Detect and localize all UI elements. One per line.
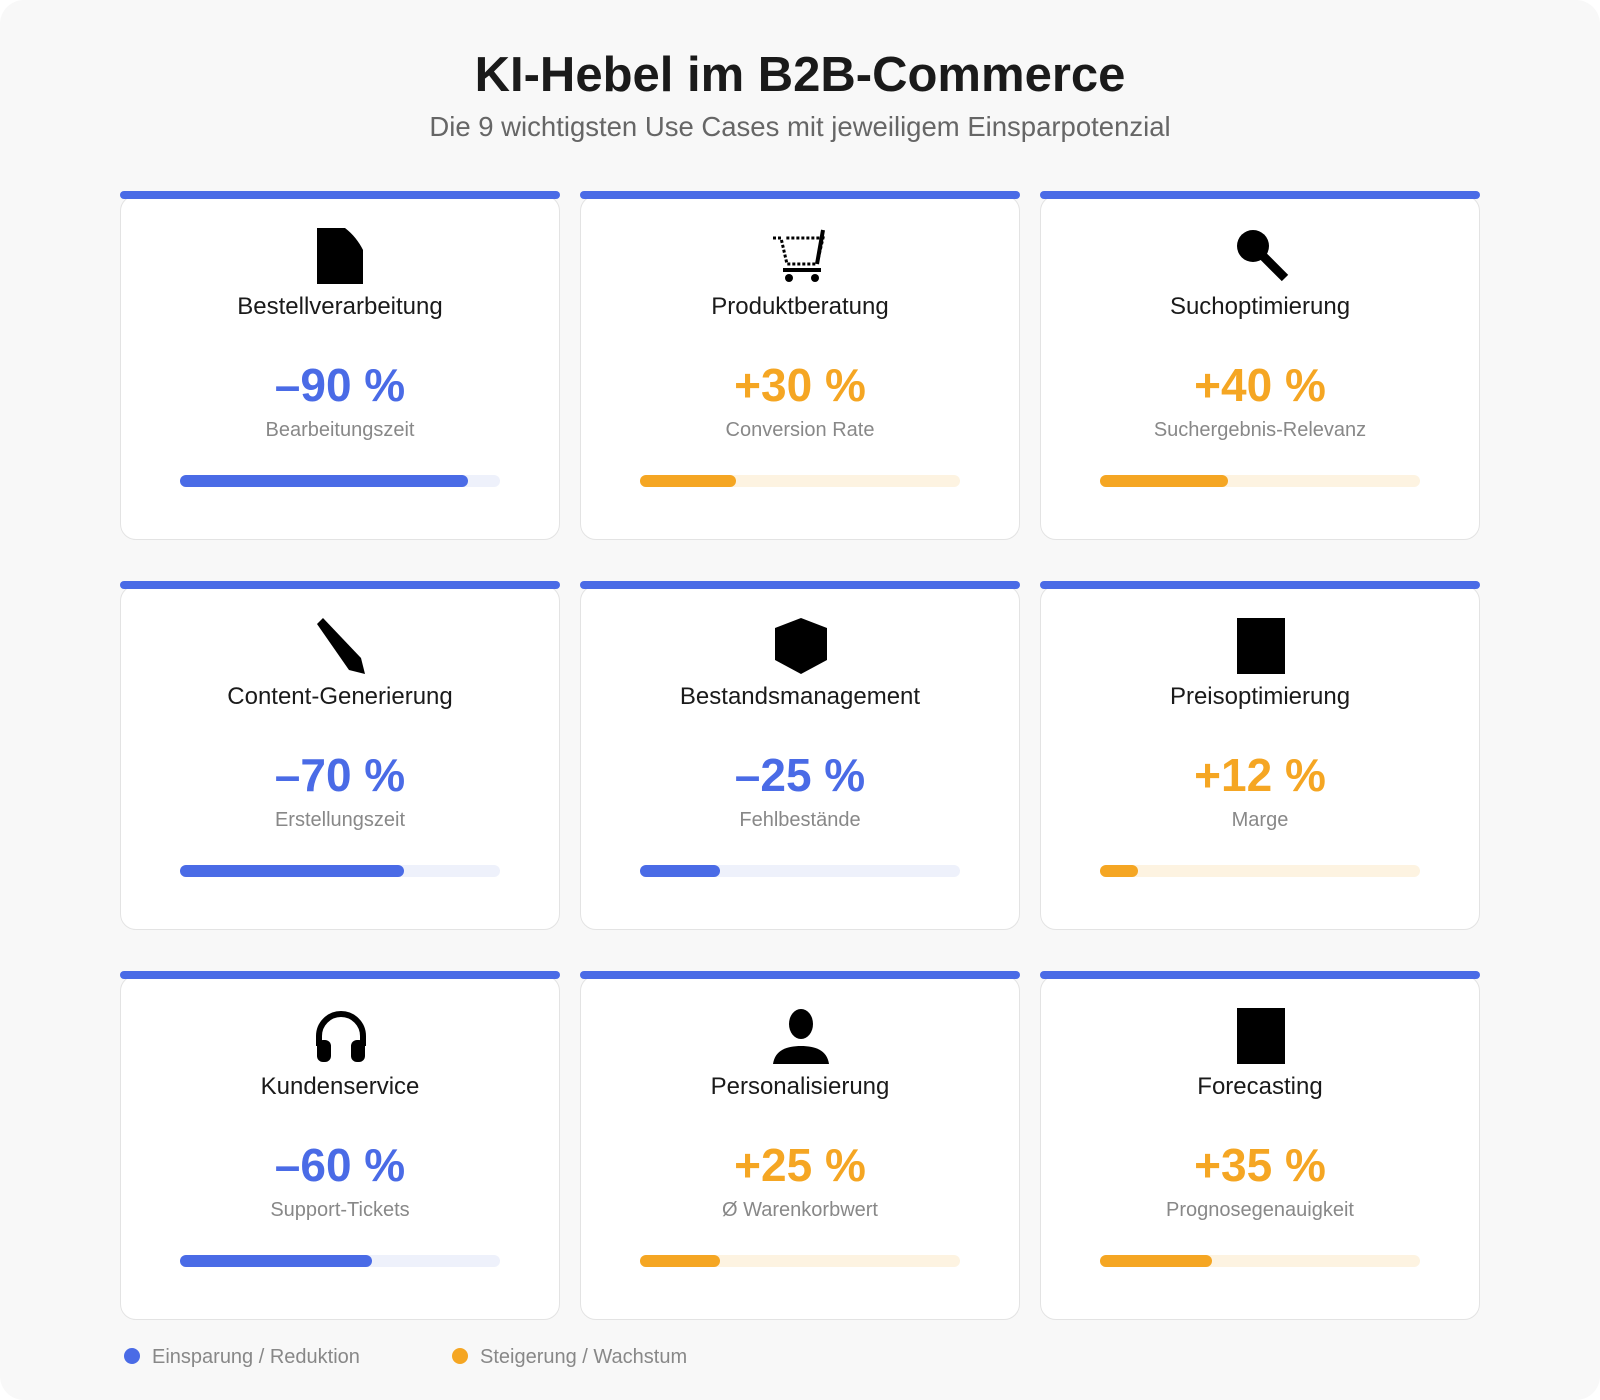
panel: Preisoptimierung: Marge xyxy=(1232,809,1288,831)
panel: Bestandsmanagement: –25 % xyxy=(735,749,865,801)
icon: rectangle xyxy=(1237,1008,1285,1064)
panel: Bestellverarbeitung: –90 % xyxy=(275,359,405,411)
bar xyxy=(1100,1255,1420,1267)
panel: Kundenservice: –60 % xyxy=(275,1139,405,1191)
legend: Steigerung: Steigerung / Wachstum xyxy=(480,1346,687,1368)
bar xyxy=(640,475,960,487)
icon: magnifier xyxy=(1237,230,1288,282)
panel: Suchoptimierung xyxy=(1040,195,1480,540)
panel: Produktberatung xyxy=(580,195,1020,540)
panel: Suchoptimierung: Suchoptimierung xyxy=(1170,293,1350,320)
panel: Content-Generierung xyxy=(120,585,560,930)
panel: Bestandsmanagement: Bestandsmanagement xyxy=(680,683,920,710)
icon: cart xyxy=(773,230,825,282)
panel: Personalisierung: Ø Warenkorbwert xyxy=(722,1199,878,1221)
bar xyxy=(640,865,960,877)
panel: Bestellverarbeitung xyxy=(120,195,560,540)
panel: Content-Generierung: –70 % xyxy=(275,749,405,801)
bar xyxy=(180,865,500,877)
panel: Bestandsmanagement: Fehlbestände xyxy=(739,809,861,831)
icon: box xyxy=(775,618,827,674)
panel: Preisoptimierung: Preisoptimierung xyxy=(1170,683,1350,710)
bar xyxy=(180,1255,500,1267)
panel: Produktberatung: +30 % xyxy=(734,359,866,411)
title: KI-Hebel im B2B-Commerce xyxy=(475,48,1125,102)
panel: Preisoptimierung xyxy=(1040,585,1480,930)
icon: pencil xyxy=(317,618,365,674)
icon: person xyxy=(773,1009,829,1064)
panel: Forecasting: Forecasting xyxy=(1197,1073,1323,1100)
bar xyxy=(1100,475,1420,487)
bar xyxy=(180,475,500,487)
bar xyxy=(1100,865,1420,877)
panel: Forecasting: Prognosegenauigkeit xyxy=(1166,1199,1354,1221)
panel: Kundenservice: Support-Tickets xyxy=(270,1199,410,1221)
panel: Bestellverarbeitung: Bestellverarbeitung xyxy=(237,293,443,320)
panel: Kundenservice: Kundenservice xyxy=(261,1073,419,1100)
panel: Content-Generierung: Content-Generierung xyxy=(227,683,453,710)
panel: Personalisierung: +25 % xyxy=(734,1139,866,1191)
panel: Produktberatung: Produktberatung xyxy=(711,293,889,320)
panel: Kundenservice xyxy=(120,975,560,1320)
icon: rectangle xyxy=(1237,618,1285,674)
panel: Produktberatung: Conversion Rate xyxy=(726,419,874,441)
panel: Content-Generierung: Erstellungszeit xyxy=(275,809,405,831)
legend: Einsparung: Einsparung / Reduktion xyxy=(152,1346,360,1368)
subtitle: Die 9 wichtigsten Use Cases mit jeweiligem Einsparpotenzial xyxy=(429,111,1171,142)
icon: document xyxy=(317,228,363,284)
panel: Personalisierung xyxy=(580,975,1020,1320)
panel: Suchoptimierung: Suchergebnis-Relevanz xyxy=(1154,419,1366,441)
panel: Forecasting: +35 % xyxy=(1194,1139,1326,1191)
panel: Preisoptimierung: +12 % xyxy=(1194,749,1326,801)
panel: Bestellverarbeitung: Bearbeitungszeit xyxy=(266,419,414,441)
bar xyxy=(640,1255,960,1267)
panel: Bestandsmanagement xyxy=(580,585,1020,930)
panel: Forecasting xyxy=(1040,975,1480,1320)
panel: Personalisierung: Personalisierung xyxy=(711,1073,889,1100)
panel: Suchoptimierung: +40 % xyxy=(1194,359,1326,411)
icon: headphones xyxy=(316,1011,366,1062)
